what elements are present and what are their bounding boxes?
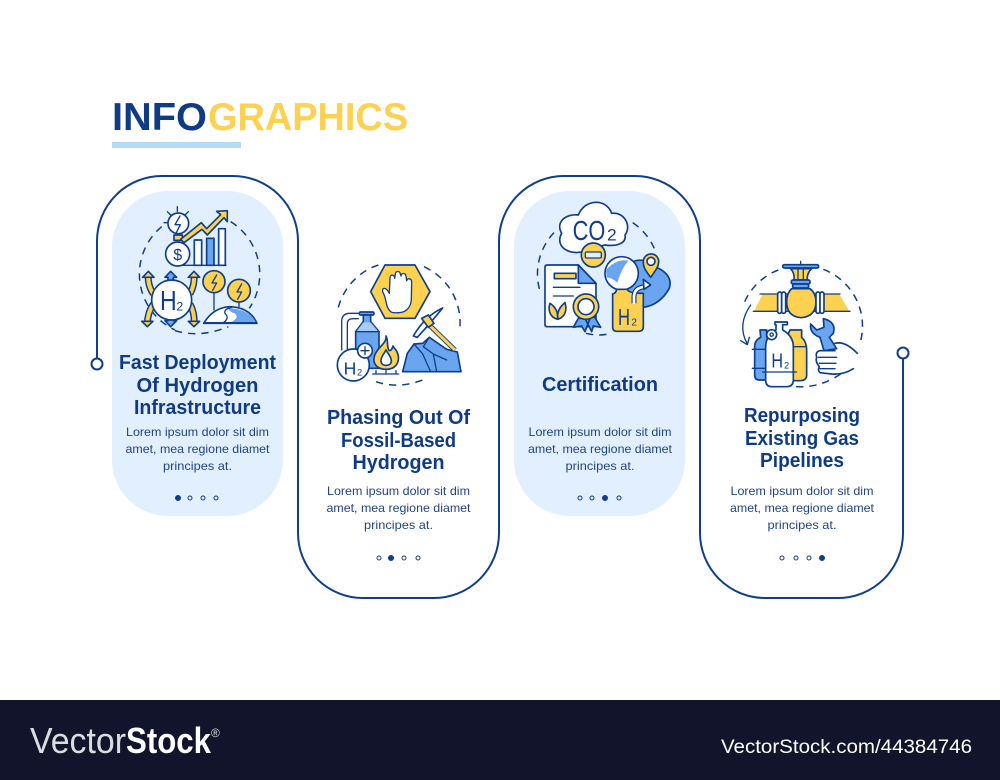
icon: stop fossil-based hydrogen xyxy=(337,265,461,385)
icon: stop fossil-based hydrogen: 2 xyxy=(357,367,362,377)
heading: column 3: Certification xyxy=(542,374,658,396)
page dots: column 4 xyxy=(780,556,824,560)
heading: column 1: Of Hydrogen xyxy=(136,375,258,397)
text block: column 4: principes at. xyxy=(768,518,836,532)
footer band xyxy=(0,700,1000,780)
page dots: column 2 xyxy=(377,556,420,560)
heading: column 4: Existing Gas xyxy=(745,428,859,450)
page dots: column 3 xyxy=(578,496,621,500)
icon: hydrogen infrastructure growth xyxy=(139,207,260,334)
text block: column 2: amet, mea regione diamet xyxy=(326,501,471,515)
heading: column 2: Phasing Out Of xyxy=(327,407,470,429)
heading: column 4: Pipelines xyxy=(760,450,844,472)
title: GRAPHICS xyxy=(208,96,408,139)
icon: certification: CO xyxy=(573,215,605,246)
heading: column 2 xyxy=(327,407,470,474)
heading: column 1: Fast Deployment xyxy=(119,352,276,374)
text block: column 3: Lorem ipsum dolor sit dim xyxy=(528,425,672,439)
title: INFO xyxy=(112,96,207,139)
icon: certification: H xyxy=(618,304,630,330)
light panel: column 1 xyxy=(112,191,283,516)
page dots: column 1 xyxy=(176,496,218,500)
heading: column 2: Fossil-Based xyxy=(341,430,456,452)
text block: column 3 xyxy=(528,425,673,473)
light panel: column 3 xyxy=(514,191,685,516)
heading: column 1 xyxy=(119,352,276,419)
text block: column 2: principes at. xyxy=(364,518,433,532)
connecting outline xyxy=(92,176,908,598)
icon: repurposing gas pipelines: H xyxy=(771,349,783,372)
icon: repurposing gas pipelines xyxy=(741,261,862,387)
text block: column 1: Lorem ipsum dolor sit dim xyxy=(126,425,269,439)
title xyxy=(112,96,408,139)
icon: hydrogen infrastructure growth: $ xyxy=(173,247,182,264)
heading: column 2: Hydrogen xyxy=(352,452,444,474)
text block: column 4: Lorem ipsum dolor sit dim xyxy=(730,484,874,498)
icon: repurposing gas pipelines: 2 xyxy=(784,360,789,370)
icon: hydrogen infrastructure growth: H xyxy=(160,285,177,316)
icon: certification: 2 xyxy=(631,317,637,328)
footer image id: VectorStock.com/44384746 xyxy=(721,737,972,758)
icon: hydrogen infrastructure growth: 2 xyxy=(176,300,183,314)
heading: column 4: Repurposing xyxy=(744,405,860,427)
text block: column 4 xyxy=(730,484,875,532)
text block: column 1: principes at. xyxy=(163,459,232,473)
footer logo xyxy=(30,720,220,761)
heading: column 1: Infrastructure xyxy=(134,397,261,419)
text block: column 2 xyxy=(326,484,471,532)
footer logo: Vector xyxy=(30,720,126,761)
text block: column 2: Lorem ipsum dolor sit dim xyxy=(327,484,470,498)
text block: column 1 xyxy=(126,425,270,473)
icon: stop fossil-based hydrogen: H xyxy=(344,358,356,378)
footer logo: Stock xyxy=(126,720,212,761)
icon: certification: 2 xyxy=(607,225,617,244)
text block: column 1: amet, mea regione diamet xyxy=(126,442,270,456)
text block: column 3: principes at. xyxy=(566,459,634,473)
title underline xyxy=(112,142,241,148)
text block: column 4: amet, mea regione diamet xyxy=(730,501,875,515)
text block: column 3: amet, mea regione diamet xyxy=(528,442,673,456)
heading: column 4 xyxy=(744,405,860,472)
icon: certification xyxy=(537,202,670,335)
footer logo: ® xyxy=(211,726,220,740)
